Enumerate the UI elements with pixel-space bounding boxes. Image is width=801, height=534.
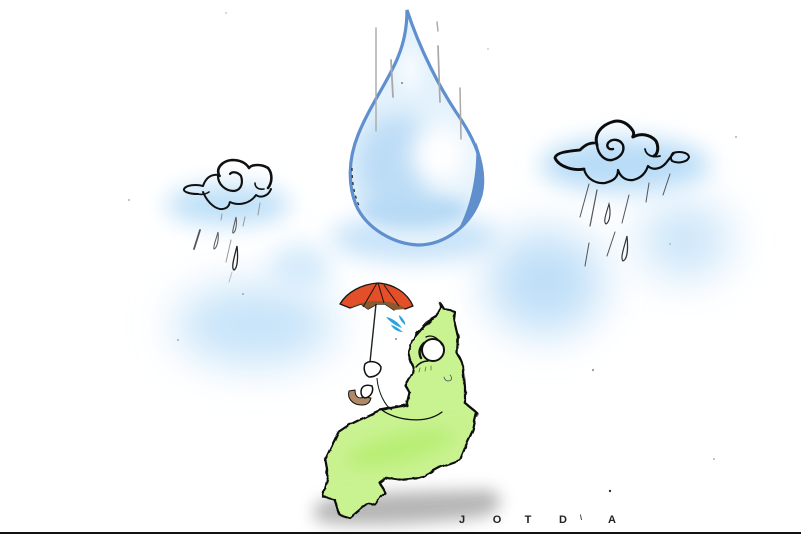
raindrop — [350, 10, 483, 245]
left cloud — [184, 160, 271, 209]
signature: D — [559, 514, 567, 526]
hands and cane handle — [349, 362, 392, 410]
umbrella — [340, 283, 413, 362]
rain streaks over the drop — [376, 22, 461, 139]
signature — [459, 514, 616, 526]
signature: O — [493, 514, 502, 526]
signature: A — [608, 514, 616, 526]
ground shadow — [315, 490, 500, 525]
right cloud — [555, 121, 689, 183]
bottom border — [0, 532, 801, 534]
left cloud rain — [194, 203, 260, 282]
sweat drops — [386, 315, 405, 340]
signature: J — [459, 514, 465, 526]
signature: T — [525, 514, 532, 526]
body highlight — [343, 421, 457, 475]
signature: \ — [580, 515, 582, 522]
green character body — [323, 303, 477, 518]
background: blue watercolor wash — [166, 138, 730, 365]
character face — [382, 336, 451, 420]
ink specks — [128, 12, 737, 492]
right cloud rain — [580, 174, 670, 266]
